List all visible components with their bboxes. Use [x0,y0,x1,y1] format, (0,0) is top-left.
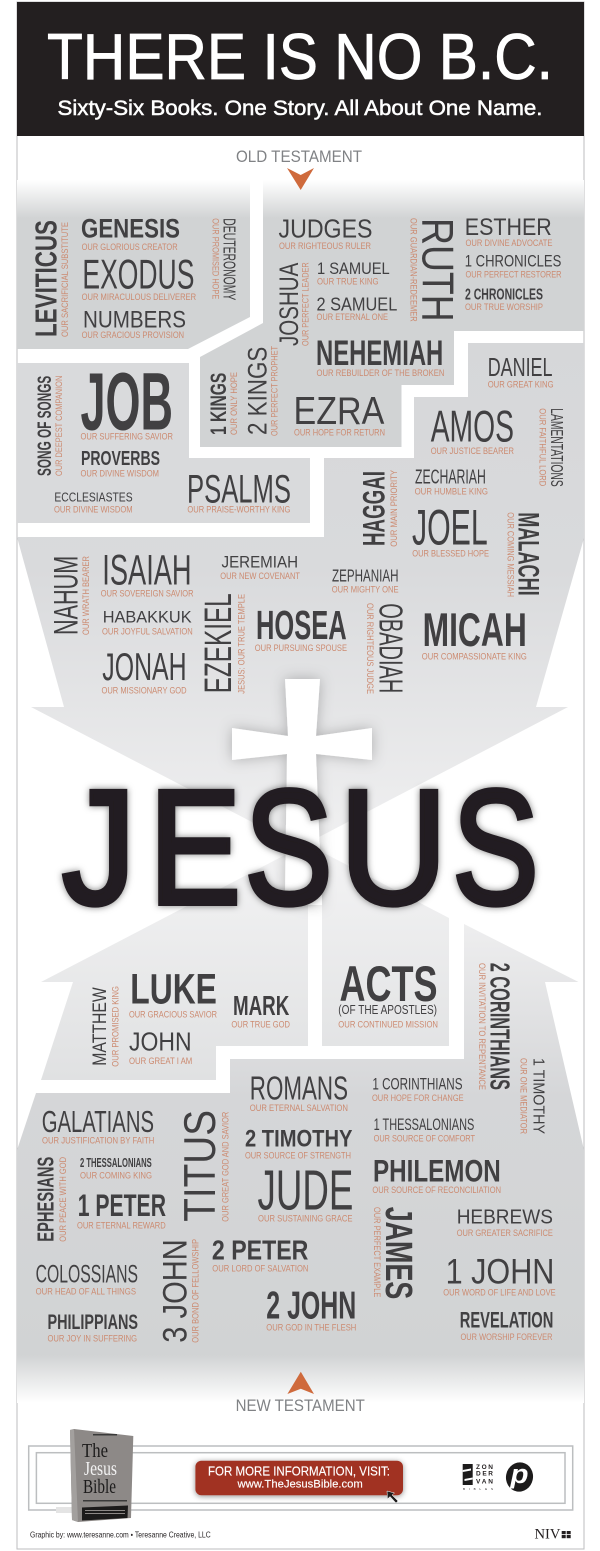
ISAIAH: OUR SOVEREIGN SAVIOR [101,589,194,599]
credit line: Graphic by: www.teresanne.com • Teresanne Creative, LLC [30,1530,211,1540]
ECCLESIASTES: ECCLESIASTES [54,490,133,505]
SONG OF SONGS: SONG OF SONGS [34,376,56,476]
2 THESSALONIANS: OUR COMING KING [80,1170,152,1180]
GALATIANS [42,1104,154,1146]
LEVITICUS [30,220,71,337]
logo: zondervan: ZON [476,1464,493,1471]
LAMENTATIONS [538,408,567,487]
EXODUS: OUR MIRACULOUS DELIVERER [82,292,196,302]
GALATIANS: OUR JUSTIFICATION BY FAITH [42,1136,154,1146]
JESUS wordmark: S [452,756,539,938]
MALACHI: OUR COMING MESSIAH [506,512,516,597]
MATTHEW [89,986,121,1067]
panel: books of poetry [17,363,310,523]
1 CORINTHIANS: 1 CORINTHIANS [372,1074,462,1093]
EPHESIANS: OUR PEACE WITH GOD [58,1157,69,1242]
JOEL: JOEL [412,499,488,555]
JOSHUA [274,262,310,346]
RUTH: RUTH [413,218,462,322]
LEVITICUS: OUR SACRIFICIAL SUBSTITUTE [60,222,71,337]
panel: books of the law [17,180,250,349]
JUDGES: JUDGES [278,213,372,243]
TITUS: OUR GREAT GOD AND SAVIOR [220,1112,231,1222]
EZEKIEL: EZEKIEL [198,593,240,693]
1 PETER: OUR ETERNAL REWARD [77,1221,166,1231]
PHILEMON: OUR SOURCE OF RECONCILIATION [372,1185,501,1195]
1 PETER [77,1187,166,1231]
1 SAMUEL [317,259,390,287]
JAMES: JAMES [377,1207,419,1299]
LUKE [129,965,217,1020]
JESUS wordmark: J [62,756,136,938]
ZECHARIAH: OUR HUMBLE KING [415,487,488,497]
LAMENTATIONS: OUR FAITHFUL LORD [538,408,548,487]
COLOSSIANS: OUR HEAD OF ALL THINGS [36,1287,136,1297]
2 SAMUEL [316,295,397,322]
ACTS: OUR CONTINUED MISSION [338,1020,438,1030]
1 JOHN: 1 JOHN [446,1252,554,1291]
DEUTERONOMY: DEUTERONOMY [219,218,239,300]
MARK: MARK [233,990,289,1021]
DANIEL [488,354,554,390]
REVELATION: REVELATION [460,1308,553,1333]
1 JOHN: OUR WORD OF LIFE AND LOVE [443,1288,556,1298]
MATTHEW: MATTHEW [89,987,111,1066]
icon: book: Bible [83,1476,116,1498]
AMOS [431,403,514,456]
PSALMS: PSALMS [187,467,291,511]
GENESIS [81,214,180,252]
ZECHARIAH [415,467,488,497]
HAGGAI: HAGGAI [356,471,391,546]
MICAH: MICAH [423,604,527,657]
JEREMIAH [220,552,301,581]
2 JOHN: 2 JOHN [266,1284,356,1327]
JEREMIAH: JEREMIAH [222,552,298,571]
JEREMIAH: OUR NEW COVENANT [220,571,301,581]
SONG OF SONGS [34,376,64,476]
title: THERE IS NO B.C. [47,20,553,93]
RUTH: OUR GUARDIAN-REDEEMER [408,218,419,322]
NEHEMIAH: NEHEMIAH [316,334,443,373]
logo: zondervan: BIBLES [463,1487,493,1491]
1 PETER: 1 PETER [78,1187,166,1223]
REVELATION: OUR WORSHIP FOREVER [460,1332,552,1342]
JESUS wordmark: U [340,756,448,938]
JOB: OUR SUFFERING SAVIOR [80,431,173,441]
logo: zondervan: VAN [476,1478,493,1485]
logo: publisher p [503,1459,536,1494]
panel: epistles arrow pointing up [17,924,584,1403]
GENESIS: GENESIS [81,214,180,244]
REVELATION [460,1308,553,1342]
JAMES [371,1207,419,1299]
JOHN: JOHN [129,1027,192,1057]
NUMBERS: OUR GRACIOUS PROVISION [82,330,184,340]
OBADIAH: OBADIAH [371,603,408,693]
PROVERBS: OUR DIVINE WISDOM [80,468,159,478]
2 JOHN: OUR GOD IN THE FLESH [266,1322,356,1332]
ROMANS: OUR ETERNAL SALVATION [250,1103,348,1113]
PSALMS: OUR PRAISE-WORTHY KING [187,504,291,514]
EZEKIEL: JESUS: OUR TRUE TEMPLE [236,594,246,694]
JOB: JOB [80,356,173,447]
JOHN: OUR GREAT I AM [129,1056,192,1066]
2 JOHN [266,1284,356,1332]
JESUS wordmark: E [149,756,241,938]
EZEKIEL [198,593,246,694]
MALACHI: MALACHI [511,512,544,596]
PHILIPPIANS: OUR JOY IN SUFFERING [48,1333,137,1343]
ZEPHANIAH: OUR MIGHTY ONE [332,585,399,595]
button: more information: www.TheJesusBible.com [236,1479,363,1491]
AMOS: AMOS [431,403,514,452]
heading: new testament: NEW TESTAMENT [236,1397,365,1415]
HABAKKUK: OUR JOYFUL SALVATION [102,626,193,636]
header band [17,2,584,136]
1 THESSALONIANS: 1 THESSALONIANS [374,1115,474,1134]
LEVITICUS: LEVITICUS [30,220,64,337]
LUKE: LUKE [130,965,217,1013]
MARK [231,990,290,1030]
PHILIPPIANS: PHILIPPIANS [48,1310,138,1334]
1 SAMUEL: OUR TRUE KING [317,277,379,287]
2 TIMOTHY: 2 TIMOTHY [245,1126,352,1153]
2 CHRONICLES: 2 CHRONICLES [465,286,543,303]
AMOS: OUR JUSTICE BEARER [431,446,514,456]
ISAIAH: ISAIAH [102,546,192,594]
JONAH [102,646,187,695]
LAMENTATIONS: LAMENTATIONS [547,408,567,487]
logo: zondervan [463,1464,493,1491]
DANIEL: DANIEL [488,354,552,382]
white cross [232,679,372,905]
MICAH [422,604,527,661]
MARK: OUR TRUE GOD [231,1020,290,1030]
EZRA: OUR HOPE FOR RETURN [294,428,385,438]
JUDE: JUDE [258,1158,353,1222]
ISAIAH [101,546,194,599]
MALACHI [506,512,544,597]
MATTHEW: OUR PROMISED KING [110,986,121,1067]
1 KINGS: OUR ONLY HOPE [229,372,239,435]
JOB [80,356,173,447]
PHILEMON [372,1153,501,1195]
2 KINGS: OUR PERFECT PROPHET [269,346,279,436]
COLOSSIANS [36,1260,138,1297]
2 PETER [212,1234,308,1274]
JUDE [258,1158,353,1224]
panel: gospels arrow pointing up [41,855,308,1080]
JOEL [412,499,489,559]
icon: cursor [387,1491,398,1503]
JOEL: OUR BLESSED HOPE [412,549,489,559]
button: more information [195,1461,403,1495]
NAHUM: OUR WRATH BEARER [81,556,92,635]
HABAKKUK: HABAKKUK [103,608,192,627]
icon: book: Jesus [84,1458,117,1480]
2 PETER: 2 PETER [212,1234,308,1265]
EZRA: EZRA [294,390,385,433]
COLOSSIANS: COLOSSIANS [36,1260,138,1288]
2 THESSALONIANS: 2 THESSALONIANS [80,1156,152,1170]
button: more information: FOR MORE INFORMATION, VISIT: [208,1465,390,1479]
1 CHRONICLES: OUR PERFECT RESTORER [466,270,562,280]
2 CORINTHIANS: OUR INVITATION TO REPENTANCE [477,963,487,1090]
1 TIMOTHY [517,1058,546,1134]
1 TIMOTHY: OUR ONE MEDIATOR [517,1058,528,1134]
subtitle: Sixty-Six Books. One Story. All About One Name. [58,97,542,120]
PHILEMON: PHILEMON [373,1153,501,1189]
logo: NIV: NIV [534,1526,561,1542]
1 CORINTHIANS: OUR HOPE FOR CHANGE [372,1093,464,1103]
1 CORINTHIANS [372,1074,464,1103]
DEUTERONOMY [210,218,239,300]
JUDE: OUR SUSTAINING GRACE [258,1214,353,1224]
3 JOHN: OUR BOND OF FELLOWSHIP [190,1239,202,1343]
PHILIPPIANS [48,1310,138,1343]
2 SAMUEL: OUR ETERNAL ONE [316,312,388,322]
ECCLESIASTES [54,490,133,514]
1 KINGS: 1 KINGS [206,373,231,435]
EPHESIANS [32,1157,69,1242]
ESTHER: OUR DIVINE ADVOCATE [466,238,553,248]
PROVERBS [80,448,160,478]
PSALMS [187,467,291,514]
HABAKKUK [102,608,193,636]
ACTS: ACTS [340,956,438,1012]
JESUS wordmark: S [244,756,332,938]
panel: acts [322,852,449,1046]
HEBREWS: HEBREWS [457,1206,553,1228]
NAHUM: NAHUM [47,556,85,635]
HEBREWS: OUR GREATER SACRIFICE [457,1228,553,1238]
ZECHARIAH: ZECHARIAH [415,467,486,489]
DANIEL: OUR GREAT KING [488,380,554,390]
JAMES: OUR PERFECT EXAMPLE [371,1207,382,1297]
heading: old testament: OLD TESTAMENT [236,148,362,166]
ACTS: (OF THE APOSTLES) [338,1003,437,1017]
EXODUS: EXODUS [82,251,194,298]
ECCLESIASTES: OUR DIVINE WISDOM [54,504,133,514]
2 CHRONICLES: OUR TRUE WORSHIP [465,302,543,312]
arrow: down [287,168,314,190]
1 THESSALONIANS: OUR SOURCE OF COMFORT [374,1134,476,1144]
books: new testament [32,956,556,1343]
2 PETER: OUR LORD OF SALVATION [212,1264,308,1274]
ZEPHANIAH: ZEPHANIAH [332,565,398,585]
HOSEA: HOSEA [256,602,347,648]
footer frame [29,1446,573,1510]
MICAH: OUR COMPASSIONATE KING [422,651,527,661]
JOHN [129,1027,192,1066]
NEHEMIAH [316,334,444,378]
2 KINGS: 2 KINGS [242,347,272,435]
LUKE: OUR GRACIOUS SAVIOR [129,1010,217,1020]
logo: publisher p: p [509,1459,528,1489]
1 CHRONICLES: 1 CHRONICLES [465,252,561,271]
1 CHRONICLES [465,252,562,280]
HEBREWS [457,1206,553,1238]
2 SAMUEL: 2 SAMUEL [316,295,397,316]
ESTHER: ESTHER [465,214,552,241]
panel: prophets arrow pointing down [17,343,584,847]
2 CHRONICLES [465,286,543,312]
ROMANS: ROMANS [250,1069,348,1106]
HOSEA: OUR PURSUING SPOUSE [255,643,347,653]
HOSEA [255,602,347,653]
JUDGES: OUR RIGHTEOUS RULER [279,241,371,251]
2 TIMOTHY [245,1126,352,1161]
1 SAMUEL: 1 SAMUEL [317,259,390,278]
icon: book [56,1429,133,1522]
OBADIAH [365,603,408,694]
JOSHUA: OUR PERFECT LEADER [300,262,310,346]
2 CORINTHIANS [477,963,515,1090]
GALATIANS: GALATIANS [42,1104,154,1139]
2 TIMOTHY: OUR SOURCE OF STRENGTH [245,1151,351,1161]
HAGGAI [356,469,400,547]
GENESIS: OUR GLORIOUS CREATOR [82,242,178,252]
NEHEMIAH: OUR REBUILDER OF THE BROKEN [316,368,444,378]
JONAH: JONAH [102,646,187,689]
3 JOHN: 3 JOHN [157,1239,195,1343]
books: old testament [30,213,567,695]
panel: books of history [200,180,584,447]
icon: book: The [82,1440,108,1462]
ZEPHANIAH [332,565,399,595]
1 TIMOTHY: 1 TIMOTHY [529,1058,546,1134]
OBADIAH: OUR RIGHTEOUS JUDGE [365,603,375,694]
DEUTERONOMY: OUR PROMISED HOPE [210,218,221,299]
1 THESSALONIANS [374,1115,476,1144]
NUMBERS: NUMBERS [83,307,186,333]
2 CORINTHIANS: 2 CORINTHIANS [484,963,515,1090]
EPHESIANS: EPHESIANS [32,1157,58,1242]
logo: zondervan: DER [476,1471,493,1478]
NAHUM [47,556,92,635]
HAGGAI: OUR MAIN PRIORITY [389,469,400,547]
1 KINGS [206,372,239,435]
2 THESSALONIANS [80,1156,152,1180]
EXODUS [82,251,196,302]
TITUS: TITUS [176,1110,225,1222]
ACTS [338,956,438,1030]
ROMANS [250,1069,348,1113]
JOSHUA: JOSHUA [274,263,304,346]
PROVERBS: PROVERBS [81,448,160,470]
SONG OF SONGS: OUR DEEPEST COMPANION [54,376,64,476]
JESUS wordmark [62,756,539,938]
JONAH: OUR MISSIONARY GOD [102,685,187,695]
arrow: up [287,1372,314,1394]
